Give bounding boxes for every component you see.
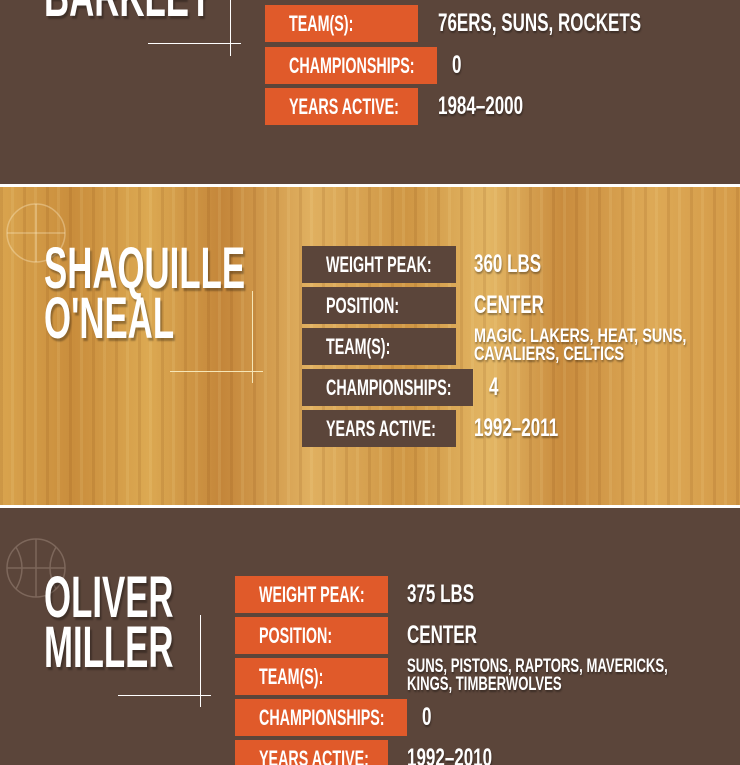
row: position: POSITION:	[326, 293, 399, 318]
icon: basketball faint	[6, 203, 66, 263]
name: Miller	[44, 565, 174, 680]
row: teams: SUNS, PISTONS, RAPTORS, MAVERICKS,	[407, 656, 668, 677]
row: championships: CHAMPIONSHIPS:	[326, 375, 452, 400]
row: years: 1992–2011	[474, 414, 558, 442]
row: teams: 76ERS, SUNS, ROCKETS	[438, 9, 641, 37]
icon: basketball	[6, 538, 66, 598]
row: teams: TEAM(S):	[326, 334, 390, 359]
row: weight: 360 LBS	[474, 250, 541, 278]
panel: Oliver Miller	[6, 538, 668, 765]
row: teams: KINGS, TIMBERWOLVES	[407, 674, 562, 695]
panel: Shaquille O'Neal	[0, 187, 740, 505]
row: championships	[265, 47, 462, 84]
row: teams: TEAM(S):	[259, 664, 323, 689]
row: weight	[235, 576, 474, 613]
crosshair	[118, 615, 211, 707]
row: championships	[302, 369, 500, 406]
row: weight: 375 LBS	[407, 580, 474, 608]
crosshair	[148, 0, 241, 56]
row: championships: CHAMPIONSHIPS:	[259, 705, 385, 730]
row: championships: 0	[422, 703, 431, 731]
row: years: YEARS ACTIVE:	[326, 416, 436, 441]
row: years	[265, 88, 524, 125]
name: Shaq: O'NEAL	[44, 286, 174, 351]
row: teams: MAGIC. LAKERS, HEAT, SUNS,	[474, 326, 686, 347]
row: years	[235, 740, 492, 765]
row: teams	[265, 5, 642, 42]
row: position: POSITION:	[259, 623, 332, 648]
row: weight: WEIGHT PEAK:	[326, 252, 432, 277]
row: teams: CAVALIERS, CELTICS	[474, 344, 624, 365]
name: Shaq	[44, 236, 246, 351]
row: years	[302, 410, 560, 447]
row: years: 1984–2000	[438, 92, 523, 120]
row: teams	[235, 656, 668, 695]
row: position	[235, 617, 477, 654]
panel: Barkley	[44, 0, 642, 125]
row: championships: 0	[452, 51, 461, 79]
name: Shaq: SHAQUILLE	[44, 236, 245, 301]
row: years: YEARS ACTIVE:	[289, 94, 399, 119]
row: championships	[235, 699, 432, 736]
row: weight	[302, 246, 542, 283]
row: championships: 4	[489, 373, 498, 401]
row: position	[302, 287, 544, 324]
row: teams: TEAM(S):	[289, 11, 353, 36]
crosshair	[170, 291, 263, 383]
row: position: CENTER	[474, 291, 544, 319]
name: Miller: MILLER	[44, 615, 174, 680]
row: championships: CHAMPIONSHIPS:	[289, 53, 415, 78]
row: weight: WEIGHT PEAK:	[259, 582, 365, 607]
name: Miller: OLIVER	[44, 565, 174, 630]
row: teams	[302, 326, 687, 366]
row: position: CENTER	[407, 621, 477, 649]
